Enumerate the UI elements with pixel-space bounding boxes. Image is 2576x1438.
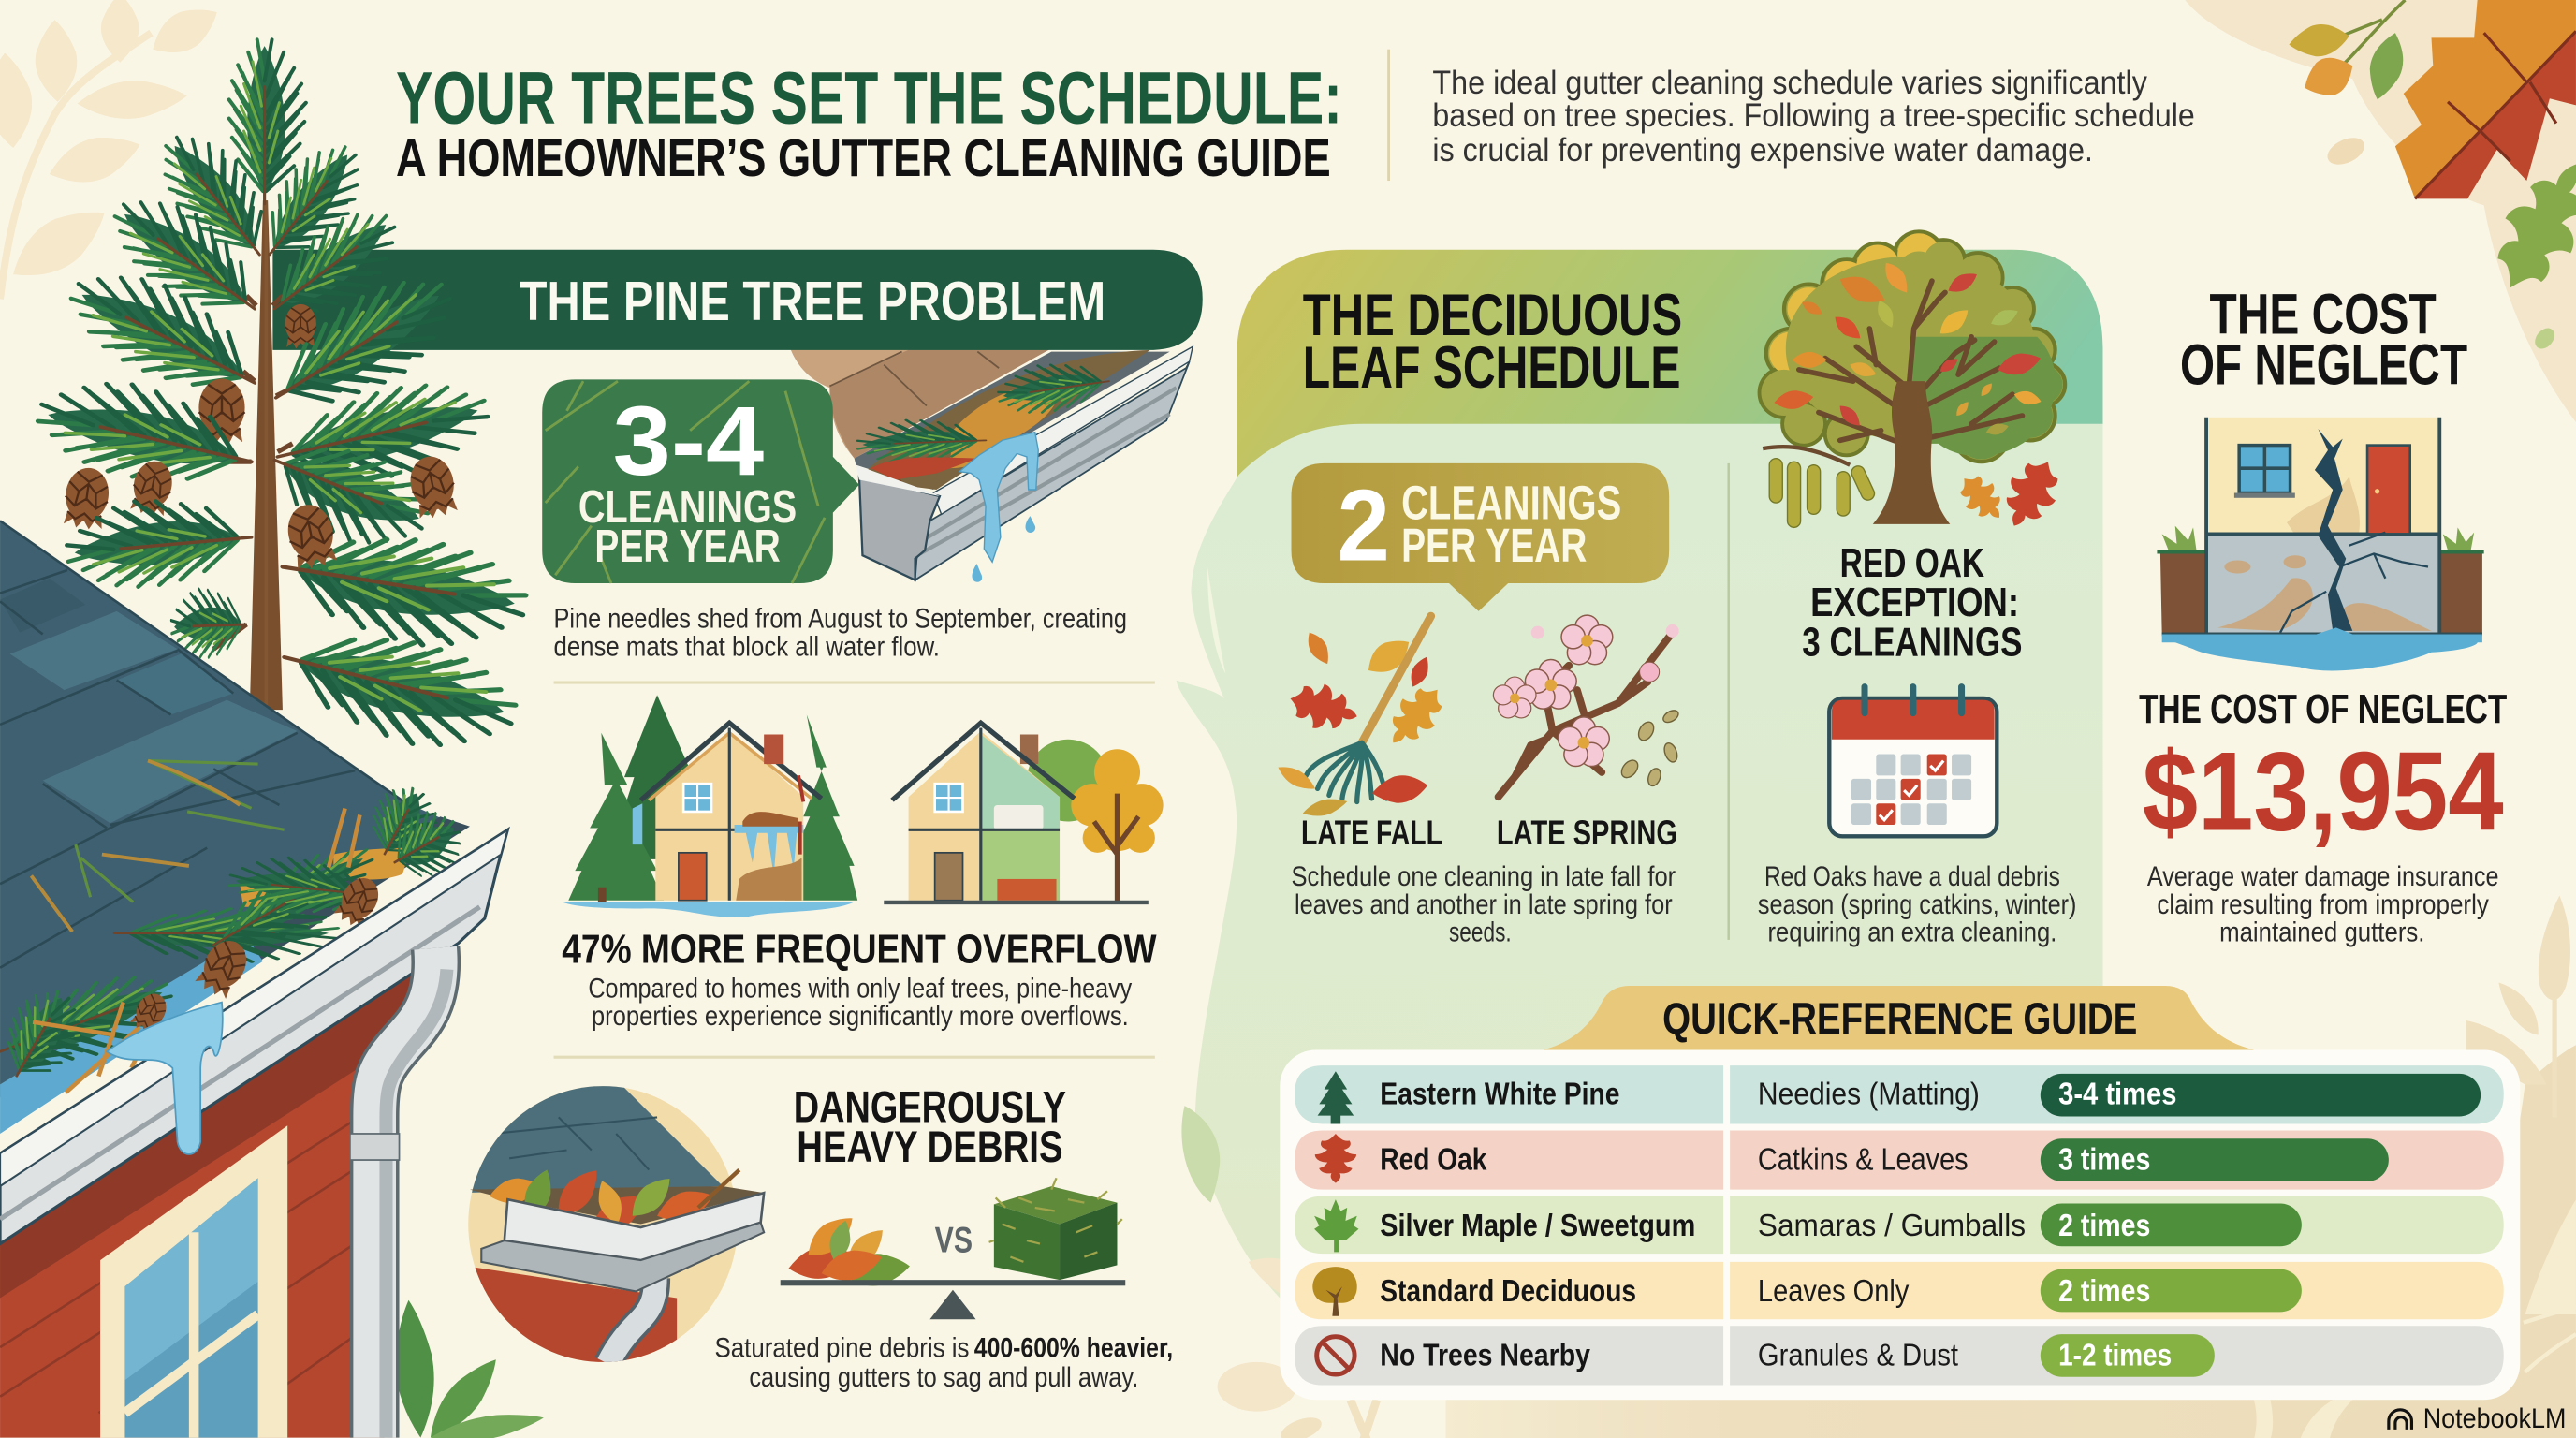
stat: cost of neglect amount: $13,954 (2143, 729, 2504, 854)
row: red oak (1295, 1130, 2504, 1190)
decorative beige leaves top left (0, 0, 227, 299)
decorative beige band and leaves bottom right (1218, 895, 2576, 1438)
row: silver maple and sweetgum: Silver Maple / Sweetgum (1380, 1209, 1695, 1243)
title divider (1387, 50, 1390, 181)
decorative bush bottom left (389, 1299, 546, 1438)
icon: water-damaged pine house (562, 695, 857, 917)
text: red oak explanation: season (spring catkins, winter) (1758, 889, 2076, 920)
icon: rake and fall leaves (1274, 616, 1454, 821)
labels: late fall and late spring (1301, 814, 1677, 852)
text: cost explanation (2147, 861, 2498, 948)
row: eastern white pine: 3-4 times (2058, 1077, 2176, 1111)
text: debris explanation: causing gutters to sag and pull away. (749, 1362, 1138, 1393)
icon: calendar (1829, 687, 1997, 836)
row: eastern white pine: Eastern White Pine (1380, 1077, 1620, 1111)
column divider (1727, 463, 1730, 940)
intro paragraph: based on tree species. Following a tree-specific schedule (1432, 97, 2195, 134)
text: deciduous explanation: Schedule one cleaning in late fall for (1292, 861, 1676, 892)
heading: 47% more frequent overflow: 47% MORE FREQUENT OVERFLOW (562, 926, 1157, 972)
heading tab: quick-reference guide (1536, 986, 2262, 1051)
title: A HOMEOWNER’S GUTTER CLEANING GUIDE (396, 128, 1331, 187)
illustration: overflowing water drip (107, 1003, 223, 1154)
badge: 3-4 cleanings per year: 3-4 (613, 387, 764, 496)
intro paragraph: is crucial for preventing expensive water damage. (1432, 132, 2093, 169)
heading: red oak exception: 3 CLEANINGS (1802, 619, 2022, 665)
badge: 3-4 cleanings per year (542, 379, 859, 583)
row: red oak: 3 times (2058, 1143, 2150, 1178)
row: standard deciduous: Standard Deciduous (1380, 1274, 1636, 1309)
heading: the cost of neglect: THE COST (2210, 282, 2437, 346)
badge: 2 cleanings per year: CLEANINGS (1401, 477, 1621, 530)
row: red oak: Red Oak (1380, 1143, 1487, 1178)
intro paragraph: The ideal gutter cleaning schedule varies significantly (1432, 65, 2147, 101)
row: standard deciduous: 2 times (2058, 1274, 2150, 1309)
icon: healthy leaf-tree house (884, 723, 1164, 904)
heading: dangerously heavy debris (794, 1083, 1066, 1172)
icon: clogged gutter (790, 346, 1193, 582)
text: pine needles explanation (554, 603, 1127, 662)
text: pine needles explanation: dense mats that block all water flow. (554, 631, 940, 662)
row: silver maple and sweetgum (1295, 1196, 2504, 1254)
illustration: house wall and window (0, 940, 459, 1438)
text: debris explanation: 400-600% heavier, (974, 1333, 1173, 1364)
illustration: roof (0, 521, 463, 1097)
heading: dangerously heavy debris: HEAVY DEBRIS (797, 1123, 1063, 1172)
text: red oak explanation (1758, 861, 2076, 948)
row: no trees nearby: 1-2 times (2058, 1338, 2172, 1372)
row: eastern white pine (1295, 1065, 2504, 1123)
illustration: downspout (350, 948, 446, 1438)
text: overflow explanation: Compared to homes with only leaf trees, pine-heavy (588, 973, 1132, 1004)
heading: red oak exception: EXCEPTION: (1810, 580, 2019, 625)
row: no trees nearby: Granules & Dust (1758, 1338, 1959, 1372)
row: standard deciduous (1295, 1262, 2504, 1319)
row: eastern white pine: Needies (Matting) (1758, 1077, 1980, 1111)
title (396, 57, 1342, 187)
heading: red oak exception: RED OAK (1840, 540, 1984, 586)
row: silver maple and sweetgum: 2 times (2058, 1209, 2150, 1243)
panel: quick-reference table (1280, 1049, 2520, 1400)
badge: 3-4 cleanings per year: CLEANINGS (578, 482, 797, 533)
text: red oak explanation: Red Oaks have a dual debris (1764, 861, 2060, 892)
text: pine needles explanation: Pine needles shed from August to September, creating (554, 603, 1127, 634)
icon: red oak tree (1760, 231, 2070, 537)
panel banner: the pine tree problem (272, 250, 1203, 350)
icon: leaf-filled gutter circle (468, 1086, 766, 1362)
heading: the deciduous leaf schedule: THE DECIDUOUS (1303, 283, 1682, 348)
text: cost explanation: Average water damage insurance (2147, 861, 2498, 892)
text: cost explanation: maintained gutters. (2219, 917, 2424, 948)
row: no trees nearby (1295, 1326, 2504, 1385)
badge: 2 cleanings per year: PER YEAR (1401, 519, 1587, 572)
text: debris explanation: Saturated pine debris is (714, 1333, 970, 1364)
text: deciduous explanation: seeds. (1449, 917, 1512, 948)
badge: 2 cleanings per year (1292, 463, 1669, 611)
section divider (554, 681, 1155, 684)
icon: blossom branch and seeds (1493, 615, 1680, 797)
text: overflow explanation: properties experience significantly more overflows. (592, 1001, 1129, 1032)
panel: deciduous header gradient (1237, 250, 2102, 542)
illustration: gutter edge (0, 829, 507, 1244)
labels: late fall and late spring: LATE SPRING (1497, 814, 1677, 852)
row: red oak: Catkins & Leaves (1758, 1143, 1969, 1178)
row: standard deciduous: Leaves Only (1758, 1274, 1910, 1309)
illustration: pine debris in gutter (0, 761, 474, 1134)
heading: the cost of neglect: OF NEGLECT (2180, 333, 2467, 398)
illustration: pine tree (31, 39, 532, 766)
intro paragraph (1432, 65, 2195, 169)
text: red oak explanation: requiring an extra cleaning. (1767, 917, 2056, 948)
section divider (554, 1056, 1155, 1059)
panel: pale green deciduous background (1177, 424, 2102, 1314)
badge: 3-4 cleanings per year: PER YEAR (594, 521, 781, 572)
stat: cost of neglect amount (2139, 686, 2507, 854)
text: deciduous explanation: leaves and another in late spring for (1295, 889, 1673, 920)
panel banner: the pine tree problem: THE PINE TREE PROBLEM (520, 270, 1105, 332)
text: overflow explanation (588, 973, 1132, 1032)
text: deciduous explanation (1292, 861, 1676, 948)
decorative autumn leaves top right (2185, 0, 2576, 422)
title: YOUR TREES SET THE SCHEDULE: (396, 57, 1342, 139)
heading: the cost of neglect (2180, 282, 2467, 398)
icon: debris weight scale: VS (935, 1220, 973, 1260)
text: cost explanation: claim resulting from improperly (2157, 889, 2489, 920)
badge: 2 cleanings per year: 2 (1338, 468, 1390, 582)
text: debris explanation (714, 1333, 1173, 1393)
heading tab: quick-reference guide: QUICK-REFERENCE GUIDE (1662, 994, 2137, 1044)
heading: red oak exception (1802, 540, 2022, 665)
labels: late fall and late spring: LATE FALL (1301, 814, 1442, 852)
row: silver maple and sweetgum: Samaras / Gumballs (1758, 1209, 2026, 1243)
icon: cracked foundation (2157, 418, 2484, 670)
heading: dangerously heavy debris: DANGEROUSLY (794, 1083, 1066, 1133)
heading: the deciduous leaf schedule: LEAF SCHEDULE (1303, 335, 1680, 401)
icon: debris weight scale (781, 1178, 1125, 1319)
decorative leaves on pale panel (1181, 566, 1331, 1314)
row: no trees nearby: No Trees Nearby (1380, 1338, 1590, 1372)
heading: the deciduous leaf schedule (1303, 283, 1682, 401)
